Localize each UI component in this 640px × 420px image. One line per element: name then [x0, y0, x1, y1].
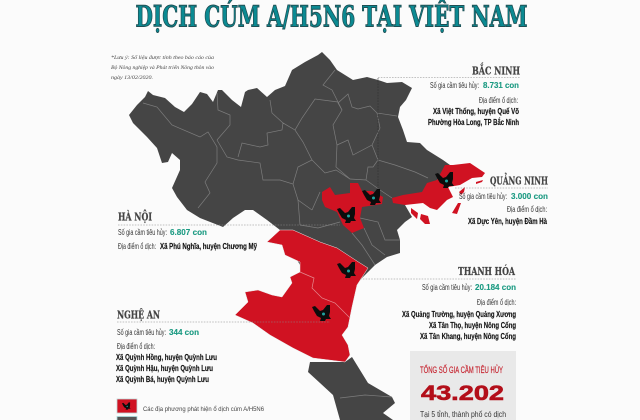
- panel: Thanh Hoa: Xã Tân Khang, huyện Nông Cống: [420, 332, 516, 341]
- dark provinces: [129, 52, 450, 290]
- panel: total: 43.202: [421, 382, 504, 405]
- icon: hen Quang Ninh: [435, 172, 454, 188]
- icon: hen Bac Ninh: [362, 189, 381, 205]
- map of northern Vietnam: [117, 52, 548, 420]
- panel: Bac Ninh: Xã Việt Thống, huyện Quế Võ: [433, 107, 519, 116]
- panel: Thanh Hoa: Xã Quảng Trường, huyện Quảng Xương: [402, 310, 516, 319]
- panel: Thanh Hoa: Số gia cầm tiêu hủy:: [422, 283, 472, 292]
- panel: Thanh Hoa: THANH HÓA: [458, 264, 516, 278]
- panel: Quang Ninh: Xã Dực Yên, huyện Đầm Hà: [468, 217, 547, 226]
- panel: Thanh Hoa: Địa điểm ổ dịch:: [477, 298, 516, 307]
- panel: Nghe An: Xã Quỳnh Hậu, huyện Quỳnh Lưu: [116, 364, 213, 373]
- panel: Ha Noi: [118, 208, 257, 251]
- dashed leader lines: [117, 78, 548, 322]
- panel: Bac Ninh: 8.731 con: [483, 80, 519, 90]
- panel: Bac Ninh: Số gia cầm tiêu hủy:: [430, 81, 479, 90]
- legend: [117, 399, 264, 420]
- panel: Thanh Hoa: Xã Tân Thọ, huyện Nông Cống: [429, 321, 516, 330]
- panel: Ha Noi: Địa điểm ổ dịch:: [118, 242, 156, 251]
- panel: Quang Ninh: [459, 172, 548, 226]
- panel: Quang Ninh: Số gia cầm tiêu hủy:: [459, 192, 507, 201]
- panel: Nghe An: [116, 308, 217, 384]
- panel: Quang Ninh: 3.000 con: [511, 191, 548, 201]
- panel: Nghe An: 344 con: [169, 327, 199, 337]
- Quang Ninh islands: [411, 180, 483, 224]
- panel: Ha Noi: Xã Phú Nghĩa, huyện Chương Mỹ: [160, 242, 257, 251]
- note: [111, 54, 214, 81]
- icon: hen Nghe An: [312, 305, 331, 321]
- panel: total: Tại 5 tỉnh, thành phố có dịch: [420, 409, 506, 419]
- note: ngày 13/02/2020.: [111, 75, 153, 81]
- panel: total: TỔNG SỐ GIA CẦM TIÊU HỦY: [420, 364, 503, 375]
- panel: Ha Noi: 6.807 con: [170, 227, 207, 237]
- legend: Các địa phương phát hiện ổ dịch cúm A/H5N6: [143, 405, 264, 413]
- red: Quang Ninh: [392, 163, 485, 210]
- province borders: [143, 70, 428, 398]
- panel: Quang Ninh: QUẢNG NINH: [490, 172, 548, 188]
- dark southern provinces: [308, 357, 395, 420]
- panel: Nghe An: Xã Quỳnh Hồng, huyện Quỳnh Lưu: [116, 353, 217, 362]
- panel: Nghe An: NGHỆ AN: [117, 308, 160, 322]
- panel: Nghe An: Xã Quỳnh Bá, huyện Quỳnh Lưu: [116, 375, 209, 384]
- panel: Ha Noi: Số gia cầm tiêu hủy:: [118, 228, 167, 237]
- red: Thanh Hoa and Nghe An: [235, 230, 368, 362]
- panel: Bac Ninh: [428, 62, 520, 127]
- panel: Thanh Hoa: 20.184 con: [475, 282, 516, 292]
- icon: hen Ha Noi: [337, 207, 356, 223]
- panel: Nghe An: Số gia cầm tiêu hủy:: [117, 328, 166, 337]
- note: Bộ Nông nghiệp và Phát triển Nông thôn vào: [111, 64, 214, 71]
- panel: Bac Ninh: Địa điểm ổ dịch:: [479, 96, 518, 105]
- panel: Bac Ninh: Phường Hòa Long, TP Bắc Ninh: [428, 118, 519, 127]
- note: *Lưu ý: Số liệu được tính theo báo cáo của: [111, 54, 214, 61]
- icon: hen Thanh Hoa: [337, 262, 356, 278]
- panel: Ha Noi: HÀ NỘI: [118, 208, 152, 224]
- panel: Quang Ninh: Địa điểm ổ dịch:: [507, 205, 547, 214]
- border: Thanh Hoa / Nghe An: [300, 272, 350, 318]
- panel: Thanh Hoa: [402, 264, 516, 341]
- panel: Nghe An: Địa điểm ổ dịch:: [117, 342, 155, 351]
- red: Ha Noi and Bac Ninh: [322, 183, 383, 233]
- panel: Bac Ninh: BẮC NINH: [472, 62, 520, 78]
- panel: total: [410, 351, 516, 420]
